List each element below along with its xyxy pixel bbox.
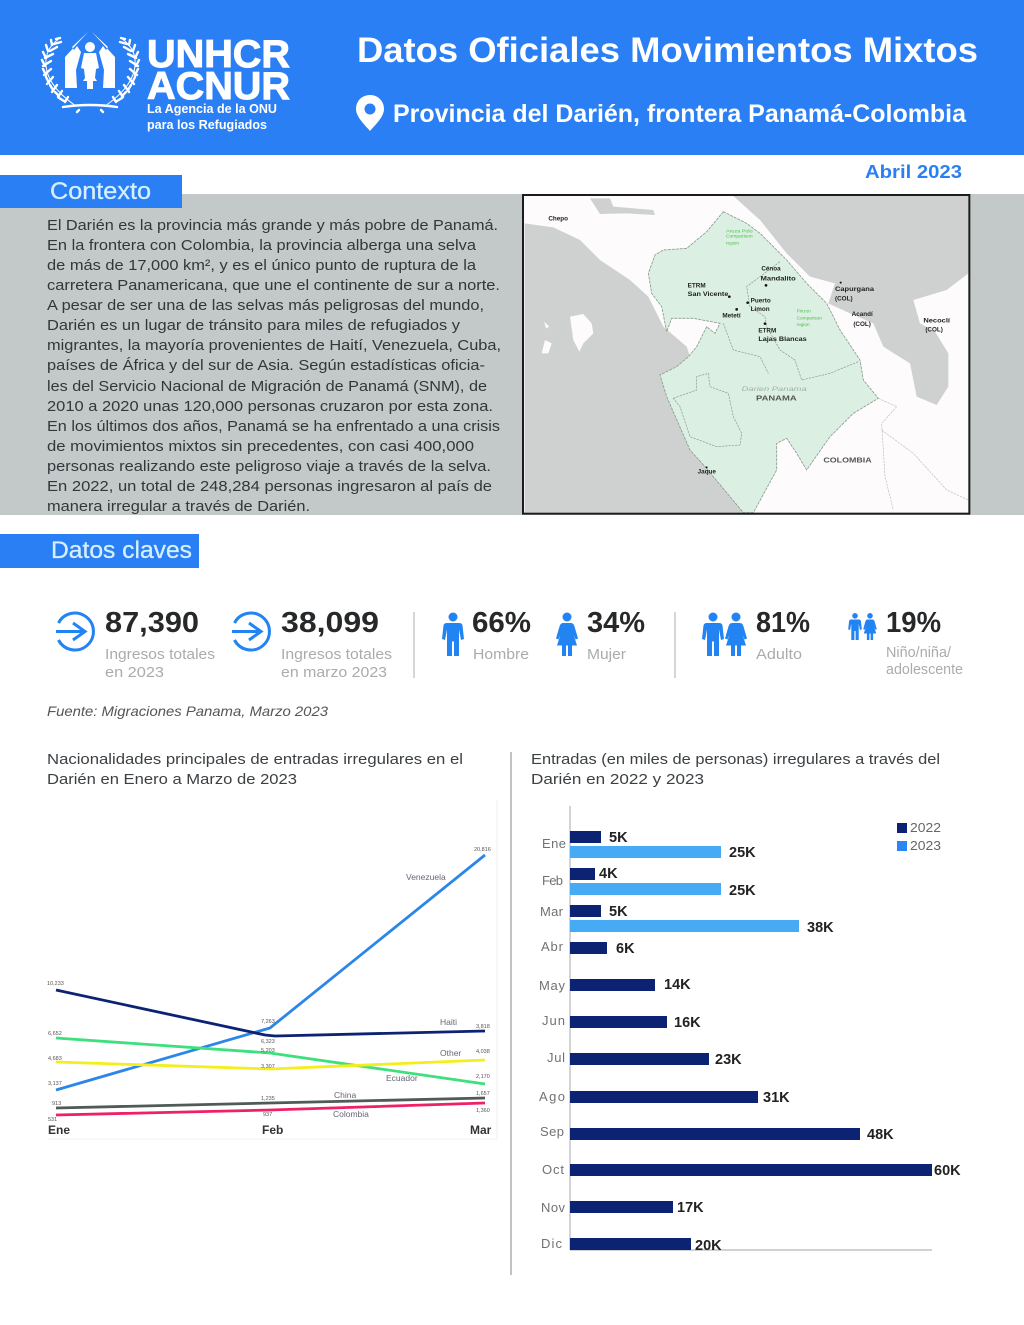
sea areas	[525, 196, 968, 513]
source note: Fuente: Migraciones Panama, Marzo 2023	[47, 703, 328, 719]
value labels: 6,323	[261, 1039, 275, 1045]
heading: monthly entries chart	[531, 751, 940, 788]
value labels: 3,818	[476, 1024, 490, 1030]
Darién province	[648, 212, 878, 513]
heading: nationalities chart: Nacionalidades principales de entradas irregulares en el	[47, 751, 463, 768]
context text block: les del Servicio Nacional de Migración de Panamá (SNM), de	[47, 378, 487, 395]
date: Abril 2023	[865, 162, 962, 182]
map labels	[548, 216, 950, 475]
map border	[523, 195, 969, 514]
value labels: 4,038	[476, 1049, 490, 1055]
icon: location pin	[356, 95, 384, 131]
series labels: Haiti	[440, 1017, 457, 1027]
map labels: (COL)	[925, 326, 943, 333]
series labels: China	[334, 1090, 356, 1100]
stat: niño: Niño/niña/	[886, 645, 952, 661]
value labels: 5K	[609, 904, 628, 920]
value labels: 14K	[664, 977, 691, 993]
map labels: region	[797, 322, 810, 327]
stat: mujer: Mujer	[587, 647, 626, 663]
map labels: Capurgana	[835, 286, 875, 293]
logo wordmark: para los Refugiados	[147, 117, 267, 132]
month labels: Feb	[542, 873, 563, 888]
series labels: Other	[440, 1048, 461, 1058]
context text block: migrantes, la mayoría provenientes de Haití, Venezuela, Cuba,	[47, 337, 501, 354]
month labels: Ene	[542, 836, 566, 851]
month labels: Jun	[542, 1013, 565, 1028]
value labels: 20,816	[474, 847, 491, 853]
stat: adulto	[702, 607, 810, 663]
stat: ingresos 2023	[56, 607, 215, 681]
map labels: Metetí	[722, 312, 741, 319]
value labels	[599, 830, 961, 1254]
stat: hombre	[442, 607, 531, 663]
map labels: COLOMBIA	[823, 458, 872, 465]
series labels: Colombia	[333, 1109, 369, 1119]
heading: nationalities chart	[47, 751, 463, 788]
icon: man	[442, 612, 464, 656]
map labels: ETRM	[688, 282, 706, 289]
value labels: 6K	[616, 941, 635, 957]
stat: ingresos marzo 2023: 38,099	[281, 607, 379, 639]
month labels: Mar	[540, 904, 564, 919]
context text block: En los últimos dos años, Panamá se ha enfrentado a una crisis	[47, 418, 500, 435]
month labels	[539, 836, 566, 1251]
map labels: Aruza Polo	[726, 229, 753, 234]
context text block	[47, 217, 501, 515]
value labels: 1,657	[476, 1091, 490, 1097]
islands	[542, 314, 593, 353]
map labels: San Vicente	[688, 291, 729, 298]
legend	[897, 820, 941, 853]
stat: ingresos 2023: en 2023	[105, 665, 164, 681]
stat: ingresos marzo 2023	[232, 607, 392, 681]
stat: mujer	[556, 607, 645, 663]
series: Other	[56, 1060, 485, 1069]
map labels: Cénoa	[761, 266, 781, 273]
value labels: 16K	[674, 1015, 701, 1031]
value labels: 48K	[867, 1127, 894, 1143]
stat: ingresos 2023: 87,390	[105, 607, 199, 639]
logo wordmark: La Agencia de la ONU	[147, 101, 277, 116]
context text block: 2010 a 2020 unas 120,000 personas cruzaron por esta zona.	[47, 398, 493, 415]
bar chart: monthly entries	[539, 806, 961, 1254]
map labels: Acandí	[852, 311, 873, 318]
series: Ecuador	[56, 1038, 485, 1084]
context text block: manera irregular a través de Darién.	[47, 498, 310, 515]
stat: hombre: 66%	[472, 607, 531, 639]
value labels: 23K	[715, 1052, 742, 1068]
heading: datos claves: Datos claves	[51, 537, 192, 564]
context text block: El Darién es la provincia más grande y más pobre de Panamá.	[47, 217, 498, 234]
bars 2022	[570, 831, 932, 1250]
heading: nationalities chart: Darién en Enero a Marzo de 2023	[47, 771, 297, 788]
value labels: 6,652	[48, 1031, 62, 1037]
legend: 2023	[910, 838, 941, 853]
value labels: 5K	[609, 830, 628, 846]
value labels: 913	[52, 1101, 61, 1107]
value labels: 31K	[763, 1090, 790, 1106]
map labels: Puerto	[751, 298, 771, 305]
series: Haití	[56, 990, 485, 1036]
stat: adulto: Adulto	[756, 647, 802, 663]
map labels: Comparison	[726, 234, 753, 239]
map labels: (COL)	[835, 296, 853, 303]
header banner	[0, 0, 1024, 155]
series labels: Venezuela	[406, 872, 446, 882]
map labels: region	[726, 240, 739, 245]
value labels: 4,683	[48, 1056, 62, 1062]
map labels: Pinzon	[797, 309, 811, 314]
context text block: Darién es un lugar de tránsito para miles de refugiados y	[47, 317, 461, 334]
logo wordmark	[147, 33, 290, 132]
value labels: 3,137	[48, 1081, 62, 1087]
map labels: (COL)	[853, 321, 871, 328]
value labels: 25K	[729, 883, 756, 899]
value labels	[47, 847, 491, 1123]
value labels: 1,235	[261, 1096, 275, 1102]
value labels: 4K	[599, 866, 618, 882]
icon: woman	[556, 612, 578, 656]
map labels: Jaque	[698, 468, 716, 475]
context text block: En la frontera con Colombia, la provincia alberga una selva	[47, 237, 477, 254]
icon: laurel wreath and sheltering hands	[42, 32, 139, 112]
heading: contexto	[0, 175, 182, 208]
icon: children	[848, 613, 877, 640]
context text block: A pesar de ser una de las selvas más peligrosas del mundo,	[47, 297, 484, 314]
value labels: 5,203	[261, 1048, 275, 1054]
value labels: 1,360	[476, 1108, 490, 1114]
series labels: Ecuador	[386, 1073, 418, 1083]
legend: 2022	[910, 820, 941, 835]
map labels: Comparison	[797, 315, 822, 320]
axis labels: Feb	[262, 1123, 283, 1137]
stat: hombre: Hombre	[473, 647, 529, 663]
series: Venezuela	[56, 855, 485, 1090]
axis labels	[48, 1123, 492, 1137]
map labels: ETRM	[758, 328, 776, 335]
value labels: 2,170	[476, 1074, 490, 1080]
axis labels: Mar	[470, 1123, 492, 1137]
icon: entry arrow	[56, 613, 93, 650]
map labels: Necoclí	[923, 318, 950, 325]
context text block: países de África y del sur de Asia. Según estadísticas oficia-	[47, 357, 485, 374]
value labels: 531	[48, 1117, 57, 1123]
month labels: May	[539, 978, 566, 993]
month labels: Ago	[539, 1089, 565, 1104]
heading: monthly entries chart: Darién en 2022 y 2023	[531, 771, 704, 788]
colombian internal border	[878, 398, 968, 510]
context text block: carretera Panamericana, que une el continente de sur a norte.	[47, 277, 500, 294]
stat: mujer: 34%	[587, 607, 645, 639]
stat: adulto: 81%	[756, 607, 810, 639]
heading: monthly entries chart: Entradas (en miles de personas) irregulares a través del	[531, 751, 940, 768]
value labels: 7,263	[261, 1019, 275, 1025]
value labels: 10,233	[47, 981, 64, 987]
value labels: 38K	[807, 920, 834, 936]
bars 2023	[570, 846, 799, 932]
map labels: Lajas Blancas	[758, 336, 807, 343]
subtitle: Provincia del Darién, frontera Panamá-Colombia	[393, 100, 967, 128]
map labels: Darien Panama	[742, 386, 807, 393]
icon: adults	[702, 612, 747, 656]
month labels: Sep	[540, 1124, 564, 1139]
logo wordmark: ACNUR	[147, 65, 290, 108]
series labels	[333, 872, 461, 1119]
stat: niño: 19%	[886, 607, 941, 639]
title: Datos Oficiales Movimientos Mixtos	[357, 31, 978, 70]
map labels: Chepo	[548, 216, 568, 223]
value labels: 3,307	[261, 1064, 275, 1070]
series: Colombia	[56, 1103, 485, 1115]
map labels: Limon	[751, 306, 770, 313]
map of Darién	[523, 195, 969, 514]
stat: niño: adolescente	[886, 662, 963, 678]
map labels: PANAMA	[756, 396, 797, 403]
month labels: Oct	[542, 1162, 564, 1177]
logo wordmark: UNHCR	[147, 33, 290, 76]
stat: niño	[848, 607, 963, 678]
icon: entry arrow	[232, 613, 269, 650]
UNHCR ACNUR logo	[42, 32, 290, 132]
context text block: personas realizando este peligroso viaje a través de la selva.	[47, 458, 491, 475]
value labels: 937	[263, 1112, 272, 1118]
line chart: nationalities	[47, 800, 497, 1139]
heading: contexto: Contexto	[50, 178, 151, 205]
stat: ingresos marzo 2023: en marzo 2023	[281, 665, 387, 681]
panel: datos claves	[0, 534, 963, 719]
heading: datos claves	[0, 534, 199, 568]
stat: ingresos 2023: Ingresos totales	[105, 647, 215, 663]
series: China	[56, 1098, 485, 1108]
value labels: 25K	[729, 845, 756, 861]
context text block: de movimientos mixtos sin precedentes, con casi 400,000	[47, 438, 474, 455]
map labels: Mandalito	[761, 276, 796, 283]
value labels: 60K	[934, 1163, 961, 1179]
month labels: Nov	[541, 1200, 566, 1215]
district borders	[673, 262, 858, 447]
stat: ingresos marzo 2023: Ingresos totales	[281, 647, 392, 663]
value labels: 17K	[677, 1200, 704, 1216]
context text block: de más de 17,000 km², y es el único punto de ruptura de la	[47, 257, 477, 274]
month labels: Dic	[541, 1236, 562, 1251]
panel: contexto	[0, 175, 1024, 515]
context text block: En 2022, un total de 248,284 personas ingresaron al país de	[47, 478, 492, 495]
month labels: Abr	[541, 939, 564, 954]
value labels: 20K	[695, 1238, 722, 1254]
axis labels: Ene	[48, 1123, 70, 1137]
month labels: Jul	[547, 1050, 565, 1065]
